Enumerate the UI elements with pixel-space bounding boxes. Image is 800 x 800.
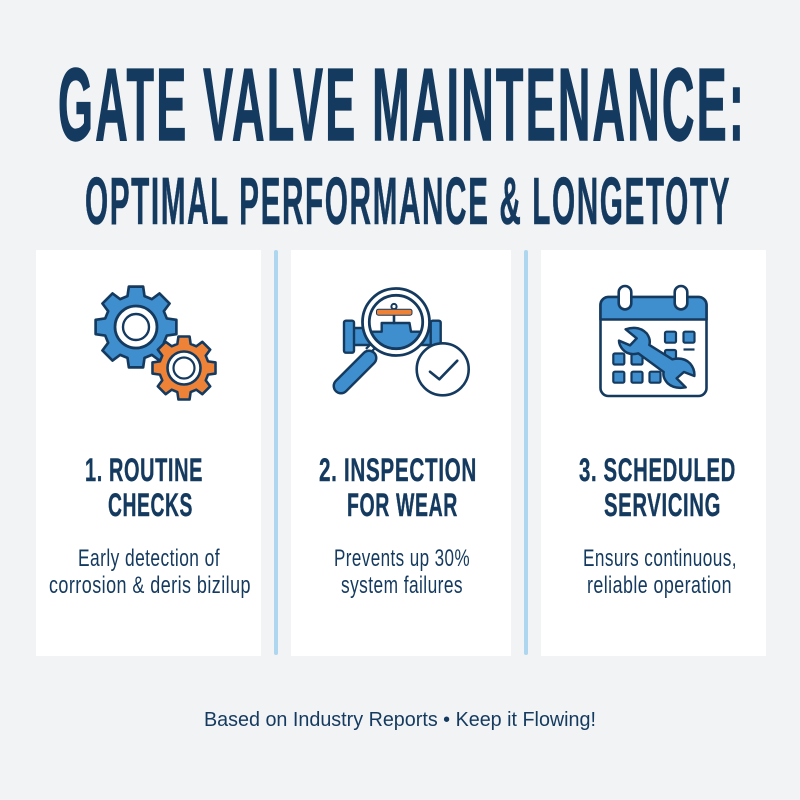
heading: routine checks (85, 452, 203, 523)
title (58, 47, 746, 239)
icon: gears (96, 287, 216, 400)
text: inspection description: system failures (341, 572, 463, 599)
text: inspection description (334, 545, 470, 599)
divider: left (274, 250, 278, 655)
text: routine checks description: Early detection of (78, 545, 220, 572)
icon: calendar with wrench (600, 286, 706, 396)
heading: routine checks: 1. ROUTINE (85, 452, 203, 488)
panel: routine checks (36, 250, 261, 656)
heading: routine checks: CHECKS (108, 487, 193, 523)
panel: scheduled servicing (541, 250, 766, 656)
text: scheduled servicing description: Ensurs continuous, (583, 545, 737, 572)
text: scheduled servicing description: reliable operation (587, 572, 732, 599)
icon: magnifier over valve with check (341, 288, 469, 395)
text: inspection description: Prevents up 30% (334, 545, 470, 572)
heading: scheduled servicing: SERVICING (604, 487, 721, 523)
text: routine checks description (49, 545, 251, 599)
text: routine checks description: corrosion & deris bizilup (49, 572, 251, 599)
heading: inspection for wear (319, 452, 477, 523)
heading: inspection for wear: 2. INSPECTION (319, 452, 477, 488)
footer: Based on Industry Reports • Keep it Flowing! (204, 708, 596, 731)
heading: scheduled servicing (579, 452, 736, 523)
divider: right (524, 250, 528, 655)
panel: inspection for wear (291, 250, 511, 656)
text: scheduled servicing description (583, 545, 737, 599)
heading: inspection for wear: FOR WEAR (347, 487, 458, 523)
